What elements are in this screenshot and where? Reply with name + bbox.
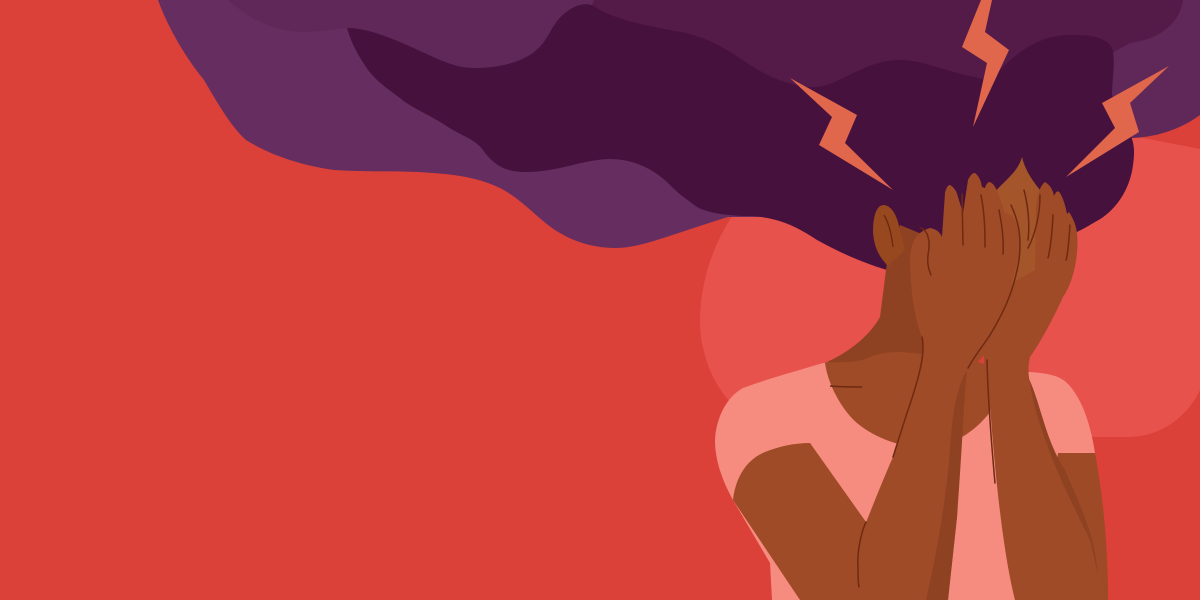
hair: flowing locks bbox=[158, 0, 1200, 272]
right arm: upper arm bbox=[1040, 453, 1108, 600]
line: right forearm bbox=[987, 360, 995, 483]
hair: outer light lock bbox=[158, 0, 780, 248]
forehead bbox=[995, 157, 1040, 240]
t-shirt bbox=[715, 363, 1100, 600]
woman figure bbox=[715, 157, 1108, 600]
ear line bbox=[884, 215, 893, 247]
icon: left lightning bolt bbox=[790, 78, 893, 190]
background blob bbox=[700, 100, 1200, 437]
left arm: forearm and hand bbox=[857, 173, 1020, 600]
line: left fingers bbox=[962, 194, 1003, 254]
hair: right lock bbox=[1090, 0, 1200, 138]
hair: upper mid lock bbox=[228, 0, 620, 90]
right arm: forearm and hand bbox=[987, 182, 1105, 600]
neck shadow bbox=[827, 225, 960, 362]
neck crease bbox=[830, 386, 862, 387]
right arm: shadow band bbox=[1028, 377, 1098, 575]
hand and arm lines bbox=[858, 190, 1070, 587]
line: left forearm bbox=[893, 337, 923, 457]
line: thumb bbox=[921, 228, 931, 275]
hair: darkest main mass bbox=[347, 4, 1134, 272]
left arm: shadow band bbox=[926, 370, 967, 600]
left upper arm bbox=[733, 443, 880, 600]
gap between the wrists bbox=[978, 355, 984, 364]
ear bbox=[873, 205, 905, 266]
chest and neck bbox=[825, 300, 1000, 448]
icon: right lightning bolt bbox=[1066, 66, 1169, 177]
line: between the hands bbox=[968, 205, 1020, 368]
lightning bolts bbox=[790, 0, 1169, 190]
icon: middle lightning bolt bbox=[962, 0, 1009, 127]
right hand: back fingers bbox=[1000, 195, 1036, 290]
line: right fingers bbox=[1024, 190, 1070, 260]
line: left elbow bbox=[858, 522, 866, 587]
hair: top dark lock bbox=[590, 0, 1183, 140]
